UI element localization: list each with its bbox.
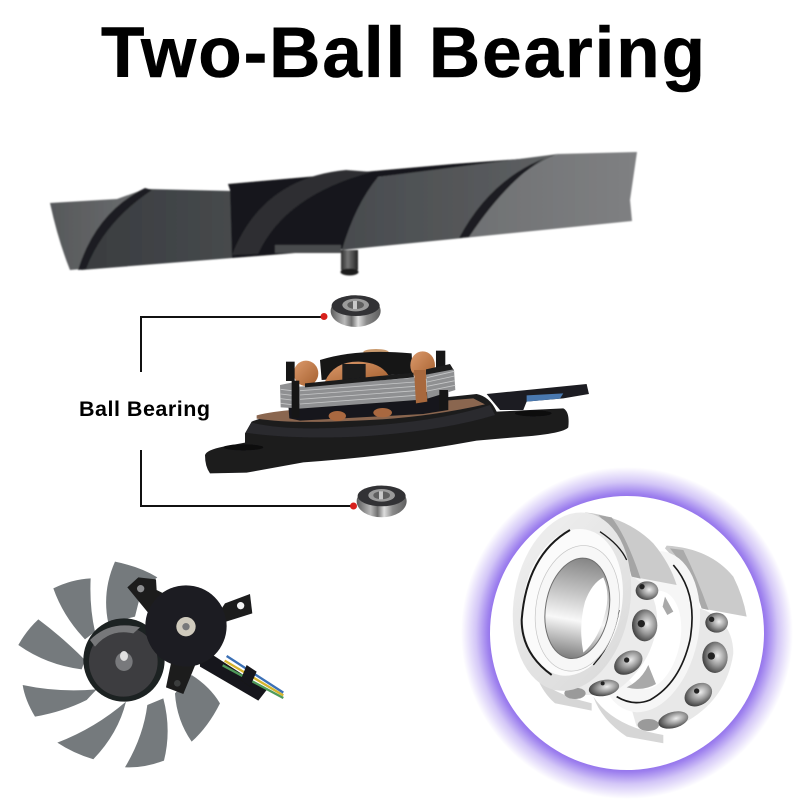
front bearing face <box>511 521 634 684</box>
lower copper left <box>329 411 346 421</box>
blade panel far right <box>463 152 637 238</box>
fan blades <box>18 562 220 767</box>
rear bore shadow top <box>663 597 673 615</box>
title: Two-Ball Bearing <box>101 14 705 93</box>
front bearing sleeve <box>585 512 677 585</box>
rear ball 3 <box>680 678 716 711</box>
blade panel left <box>81 189 232 270</box>
rear ball 5 <box>638 719 659 731</box>
curved rib left <box>78 188 152 270</box>
rear bearing outer sleeve <box>665 546 747 617</box>
right stack rim <box>426 364 453 375</box>
icon: lower small bearing <box>357 485 407 517</box>
center bearing <box>176 617 196 636</box>
rear ball 2 <box>702 642 728 673</box>
left post <box>286 362 295 381</box>
mounting base <box>205 394 569 473</box>
rear bearing <box>582 541 747 743</box>
hub label strip <box>275 245 341 253</box>
blade 6 <box>125 698 168 767</box>
blade 2 <box>53 578 95 639</box>
blade 1 <box>106 562 157 623</box>
right clamp <box>439 390 448 410</box>
rear bearing lower tail <box>593 697 663 743</box>
rear ball 1 <box>705 613 728 633</box>
purple glow <box>461 467 793 799</box>
front bearing ball cage <box>567 577 657 695</box>
blade 5 <box>57 702 126 759</box>
blade tip left <box>50 189 145 270</box>
front bearing lower tail <box>537 677 592 711</box>
rear bearing face <box>582 541 714 722</box>
shaft tip <box>340 268 358 276</box>
base ring <box>246 405 495 437</box>
motor stator assembly <box>205 349 589 473</box>
tab hole top <box>137 585 144 592</box>
front ball 4 <box>587 677 620 699</box>
left coil <box>294 361 318 386</box>
tab hole right <box>237 602 244 609</box>
wire arm <box>200 647 267 701</box>
center bearing hole <box>182 623 190 630</box>
front ball 3 <box>610 645 647 680</box>
mounting tab top <box>127 577 177 615</box>
right winding band <box>414 370 427 403</box>
laminated stack center <box>299 378 417 409</box>
right mounting hole <box>515 410 552 416</box>
stator disc <box>145 585 227 667</box>
white disc <box>490 496 764 770</box>
rear bearing bore <box>614 585 690 695</box>
front bearing sleeve edge <box>598 515 641 579</box>
laminated stack right <box>426 367 455 399</box>
stator underside <box>288 390 448 421</box>
rear ball 4 <box>656 708 690 732</box>
rear bearing ball cage <box>623 608 733 727</box>
curved rib right <box>459 153 560 238</box>
front bore opening <box>581 577 607 653</box>
fan photo <box>18 562 283 767</box>
wires <box>527 393 563 402</box>
top copper tip <box>363 349 389 355</box>
front bearing outer ring <box>499 503 645 700</box>
blade panel right <box>342 154 558 250</box>
front bearing seal arc right <box>600 532 627 560</box>
copper board <box>257 398 485 422</box>
rear bore shadow bottom <box>627 665 656 689</box>
rear bearing black arc <box>617 565 692 703</box>
left clamp <box>292 381 299 418</box>
left mounting hole <box>223 444 263 450</box>
callout: upper connector line <box>141 317 323 372</box>
blade 7 <box>175 675 220 742</box>
front bearing seal arc left <box>522 530 570 675</box>
front ball spots <box>601 584 645 685</box>
shaft collar <box>115 652 133 671</box>
rear coil <box>325 362 390 382</box>
laminated stack left <box>280 383 299 408</box>
right post <box>436 351 445 371</box>
front ball 5 <box>564 688 586 699</box>
right coil <box>410 351 435 379</box>
center curved rib <box>232 170 372 255</box>
rear ball spots <box>694 617 715 694</box>
lower copper right <box>373 408 392 417</box>
front bearing bore <box>537 553 617 664</box>
wires <box>223 656 283 698</box>
rotor hub interior <box>89 627 158 697</box>
callout: lower red dot <box>350 502 357 510</box>
front ball 1 <box>636 581 658 600</box>
shaft <box>341 250 358 270</box>
callout: lower connector line <box>141 450 353 506</box>
callout: upper red dot <box>320 313 328 320</box>
front bearing seal arc lower <box>593 610 619 665</box>
tab hole bottom <box>174 680 181 687</box>
wire clip <box>241 665 257 687</box>
top of stack rim <box>305 373 414 387</box>
wire connector <box>487 384 589 410</box>
blade 4 <box>23 685 97 717</box>
fan rotor side view <box>50 152 637 276</box>
front bearing <box>499 503 677 711</box>
rear bearing sleeve edge <box>670 548 709 610</box>
callout label: Ball Bearing <box>79 397 210 421</box>
mounting tab right <box>210 594 252 627</box>
top collar <box>320 352 413 380</box>
top tooth <box>342 364 366 380</box>
shaft pin <box>120 651 128 661</box>
illustration: bearing pair in glowing circle <box>461 467 793 799</box>
rotor hub sheen <box>90 625 140 647</box>
rotor hub rim <box>83 618 165 702</box>
mounting tab bottom <box>166 660 197 694</box>
front ball 2 <box>632 609 657 641</box>
lamination lines <box>281 371 455 405</box>
icon: upper small bearing <box>331 295 381 327</box>
front bearing inner ring <box>526 539 629 678</box>
blade 3 <box>18 619 85 669</box>
central hub <box>228 156 560 258</box>
